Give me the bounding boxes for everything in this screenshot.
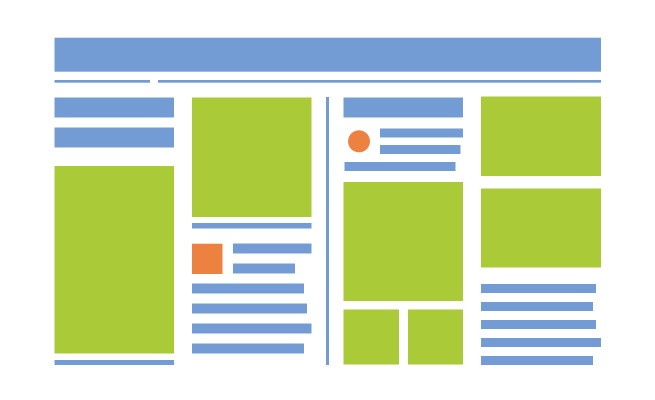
- column 4 image block bottom: [481, 188, 601, 268]
- header banner: [54, 38, 601, 72]
- header rule: right: [158, 80, 601, 83]
- column 1: [54, 98, 174, 365]
- column 2 image block: [192, 98, 312, 217]
- icon text line 1: [233, 244, 312, 254]
- column 3 text line: [344, 162, 456, 171]
- column 2 caption bar: [192, 223, 312, 228]
- column 4: [481, 96, 601, 365]
- column 2 text lines: [192, 284, 312, 354]
- column 3 large image block: [344, 182, 463, 301]
- column 2: [192, 98, 312, 354]
- column 4 text lines: [481, 284, 601, 365]
- column 3 small image right: [408, 310, 463, 364]
- icon text line 1: [380, 128, 463, 138]
- column 3 small image left: [344, 310, 399, 364]
- icon text line 2: [233, 264, 295, 274]
- column 1 tall image block: [54, 166, 174, 354]
- icon text line 2: [380, 145, 460, 154]
- icon: orange circle: [348, 130, 370, 152]
- vertical divider: [326, 97, 329, 365]
- header rule: left: [54, 80, 150, 83]
- column 1 caption bar: [54, 360, 174, 365]
- column 4 image block top: [481, 96, 601, 176]
- icon: orange square: [192, 244, 222, 274]
- column 1 heading bar 1: [54, 98, 174, 118]
- column 3 heading bar: [344, 98, 463, 118]
- column 3: [344, 98, 463, 364]
- column 1 heading bar 2: [54, 128, 174, 148]
